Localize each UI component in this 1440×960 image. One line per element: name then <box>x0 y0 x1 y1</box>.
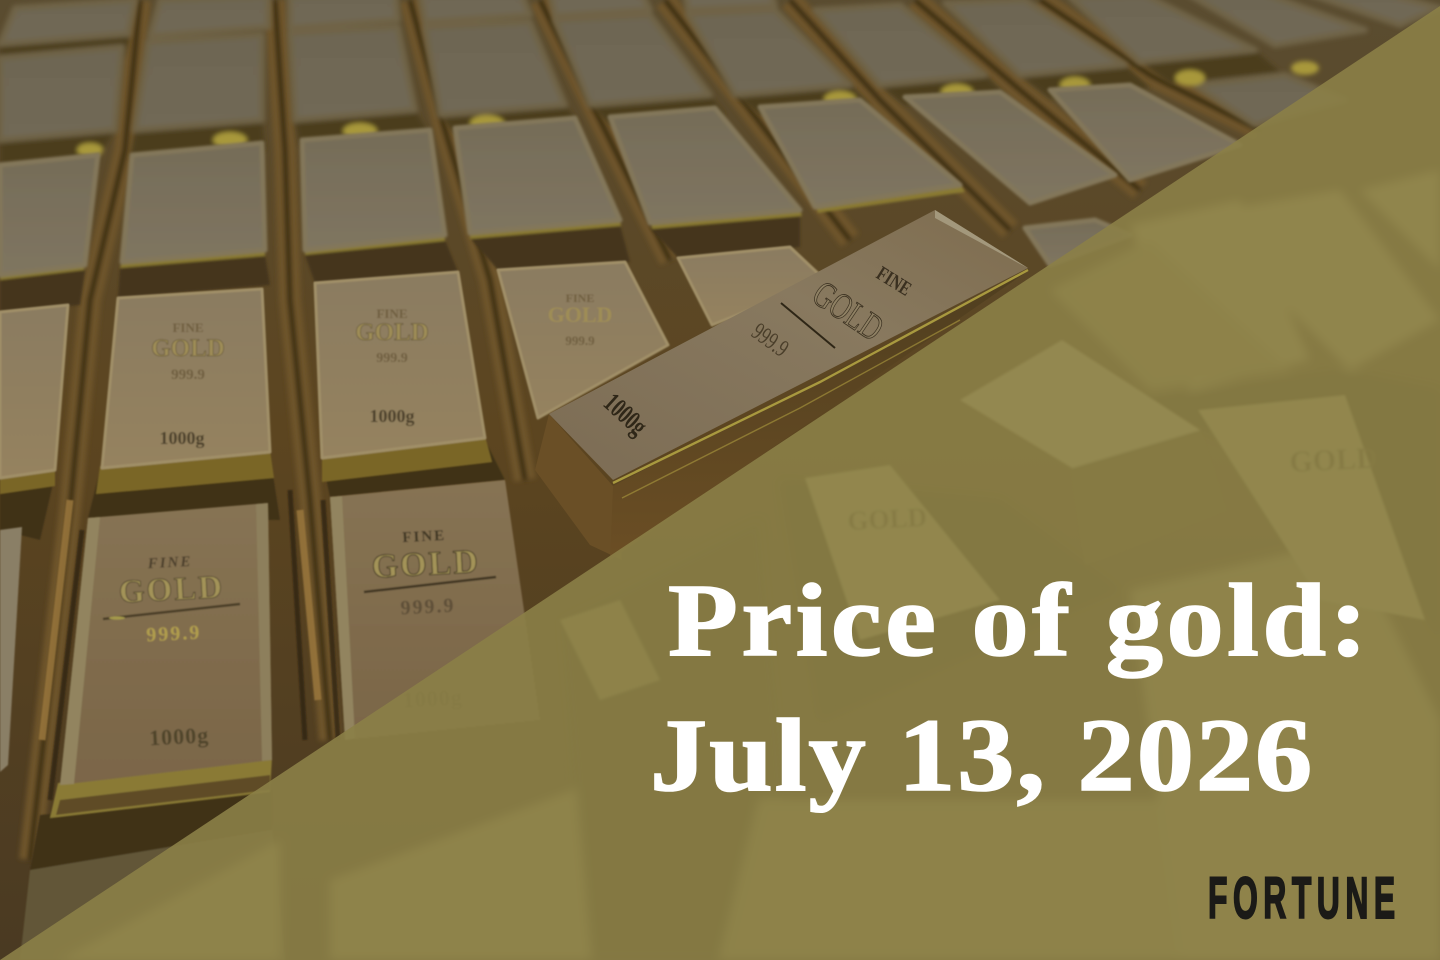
bar stamp: row two right: 999.9 <box>565 333 595 348</box>
third row of gold bars <box>0 85 1240 312</box>
submerged stamps: GOLD <box>847 502 928 536</box>
title line 2: July 13, 2026 <box>650 698 1312 813</box>
bar stamp: tilted 1000g: 1000g <box>597 388 653 442</box>
title <box>650 563 1368 813</box>
submerged stamps: GOLD <box>1289 441 1379 479</box>
bar stamp: row two centre: FINE <box>376 306 408 321</box>
bar stamp: row two left: 999.9 <box>171 367 205 383</box>
bar stamp: front right: 1000g <box>402 684 463 712</box>
bar stamp: row two centre <box>355 306 429 426</box>
back rows of gold bars <box>0 0 1440 165</box>
bar stamp: row two centre: GOLD <box>355 319 429 346</box>
second row of gold bars <box>0 247 825 540</box>
bar stamp: tilted 999.9: 999.9 <box>747 317 794 362</box>
bar stamp: tilted FINE: FINE <box>873 262 916 300</box>
bar stamp: row two right: FINE <box>566 291 594 305</box>
bar stamp: row two right <box>548 291 612 348</box>
bars under the olive panel <box>60 170 1440 960</box>
bar stamp: front left: 1000g <box>149 722 210 750</box>
bar stamp: front right: FINE <box>402 528 447 546</box>
bar stamp: row two left: 1000g <box>160 428 204 448</box>
lanes between bar columns <box>30 0 1260 860</box>
bar stamp: front right: GOLD <box>371 543 481 586</box>
bar stamp: row two right: GOLD <box>548 302 612 327</box>
bar stamp: row two left: GOLD <box>151 335 225 362</box>
submerged stamps <box>847 441 1379 536</box>
bar stamp: front left: GOLD <box>118 569 225 611</box>
bar stamp: front left: 999.9 <box>146 622 202 646</box>
front row bar left <box>20 503 285 960</box>
bar stamp: row two left <box>151 320 225 448</box>
bar stamp: front left <box>117 552 232 752</box>
bar stamp: row two left: FINE <box>172 320 204 335</box>
bar stamp: front left: FINE <box>146 554 193 572</box>
bar stamp: tilted GOLD: GOLD <box>805 273 891 350</box>
title line 1: Price of gold: <box>668 563 1368 678</box>
bar stamp: row two centre: 1000g <box>370 406 414 426</box>
gold bar tilted on top <box>535 210 1028 560</box>
bar stamp: row two centre: 999.9 <box>376 351 408 366</box>
FORTUNE logo: FORTUNE <box>1208 866 1401 930</box>
bar stamp: front right <box>370 526 487 714</box>
front row bar right <box>0 480 540 800</box>
bar stamp: front right: 999.9 <box>400 594 456 619</box>
